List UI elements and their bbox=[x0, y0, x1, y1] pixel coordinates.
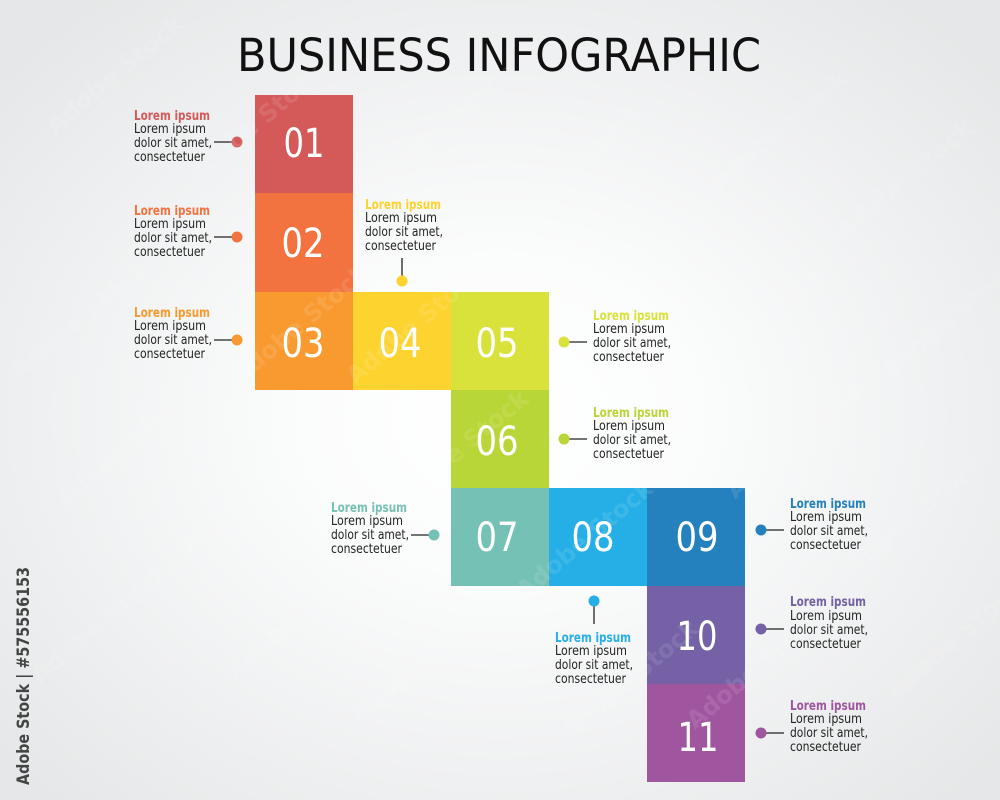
step 11: 11 bbox=[678, 715, 718, 761]
step 01: 01 bbox=[284, 121, 324, 167]
watermark pattern: Adobe Stock bbox=[551, 214, 699, 345]
callout 03: dolor sit amet, bbox=[134, 333, 212, 348]
callout 03: consectetuer bbox=[134, 347, 206, 362]
watermark pattern: Adobe Stock bbox=[41, 9, 189, 140]
watermark pattern: Adobe Stock bbox=[371, 59, 519, 190]
callout 05 bbox=[558, 309, 671, 365]
callout 11 bbox=[756, 699, 868, 755]
watermark pattern: Adobe Stock bbox=[26, 559, 174, 690]
title: BUSINESS INFOGRAPHIC bbox=[237, 29, 761, 82]
callout 04: dolor sit amet, bbox=[365, 225, 443, 240]
callout 09: Lorem ipsum bbox=[790, 510, 862, 525]
step 03: 03 bbox=[282, 321, 324, 367]
callout 10: dolor sit amet, bbox=[790, 623, 868, 638]
callout 08 bbox=[555, 596, 633, 687]
callout 10: Lorem ipsum bbox=[790, 609, 862, 624]
callout 02: consectetuer bbox=[134, 245, 206, 260]
callout 09 bbox=[756, 497, 868, 553]
callout 01: dolor sit amet, bbox=[134, 136, 212, 151]
callout 09: consectetuer bbox=[790, 538, 862, 553]
watermark pattern: Adobe Stock bbox=[181, 59, 329, 190]
callout 11: dolor sit amet, bbox=[790, 726, 868, 741]
callout 01 bbox=[134, 109, 242, 165]
callout 04: Lorem ipsum bbox=[365, 198, 441, 213]
step 02 bbox=[255, 193, 353, 292]
watermark pattern: Adobe Stock bbox=[341, 259, 489, 390]
callout 03: Lorem ipsum bbox=[134, 306, 210, 321]
callout 09: dolor sit amet, bbox=[790, 524, 868, 539]
callout 11: Lorem ipsum bbox=[790, 699, 866, 714]
callout 04 bbox=[365, 198, 443, 286]
callout 06 bbox=[558, 406, 671, 462]
step 01 bbox=[255, 95, 353, 193]
callout 08: dolor sit amet, bbox=[555, 658, 633, 673]
watermark pattern: Adobe Stock bbox=[176, 429, 324, 560]
watermark pattern: Adobe Stock bbox=[681, 259, 829, 390]
step 05 bbox=[451, 292, 549, 390]
watermark pattern: Adobe Stock bbox=[226, 259, 374, 390]
watermark pattern: Adobe Stock bbox=[501, 99, 649, 230]
callout 07: Lorem ipsum bbox=[331, 514, 403, 529]
callout 06: Lorem ipsum bbox=[593, 419, 665, 434]
callout 06: Lorem ipsum bbox=[593, 406, 669, 421]
callout 09: Lorem ipsum bbox=[790, 497, 866, 512]
callout 10: Lorem ipsum bbox=[790, 595, 866, 610]
step 10: 10 bbox=[676, 614, 718, 660]
callout 01: Lorem ipsum bbox=[134, 122, 206, 137]
step 04 bbox=[353, 292, 451, 390]
step 09 bbox=[647, 488, 745, 586]
step 09: 09 bbox=[676, 515, 718, 561]
callout 01: consectetuer bbox=[134, 150, 206, 165]
watermark pattern: Adobe Stock bbox=[831, 114, 979, 245]
step 06 bbox=[451, 390, 549, 488]
callout 07: consectetuer bbox=[331, 542, 403, 557]
callout 05: Lorem ipsum bbox=[593, 322, 665, 337]
callout 02: dolor sit amet, bbox=[134, 231, 212, 246]
watermark pattern: Adobe Stock bbox=[681, 604, 829, 735]
callout 05: Lorem ipsum bbox=[593, 309, 669, 324]
watermark pattern: Adobe Stock bbox=[556, 614, 704, 745]
watermark pattern: Adobe Stock bbox=[221, 554, 369, 685]
callout 02: Lorem ipsum bbox=[134, 217, 206, 232]
callout 07 bbox=[331, 501, 440, 557]
watermark pattern: Adobe Stock bbox=[841, 449, 989, 580]
callout 10: consectetuer bbox=[790, 637, 862, 652]
step 02: 02 bbox=[282, 221, 324, 267]
step 10 bbox=[647, 586, 745, 684]
callout 11: consectetuer bbox=[790, 740, 862, 755]
callout 05: dolor sit amet, bbox=[593, 336, 671, 351]
callout 08: Lorem ipsum bbox=[555, 644, 627, 659]
watermark pattern: Adobe Stock bbox=[51, 384, 199, 515]
callout 11: Lorem ipsum bbox=[790, 712, 862, 727]
callout 10 bbox=[756, 595, 868, 652]
watermark pattern: Adobe Stock bbox=[511, 474, 659, 605]
step 08 bbox=[549, 488, 647, 586]
callout 02: Lorem ipsum bbox=[134, 204, 210, 219]
callout 03 bbox=[134, 306, 242, 362]
step 05: 05 bbox=[476, 321, 518, 367]
callout 05: consectetuer bbox=[593, 350, 665, 365]
step 07 bbox=[451, 488, 549, 586]
callout 03: Lorem ipsum bbox=[134, 319, 206, 334]
callout 04: Lorem ipsum bbox=[365, 211, 437, 226]
step 11 bbox=[647, 684, 745, 782]
callout 01: Lorem ipsum bbox=[134, 109, 210, 124]
callout 06: consectetuer bbox=[593, 447, 665, 462]
step 04: 04 bbox=[378, 321, 422, 367]
callout 07: Lorem ipsum bbox=[331, 501, 407, 516]
watermark pattern: Adobe Stock bbox=[721, 374, 869, 505]
callout 06: dolor sit amet, bbox=[593, 433, 671, 448]
step 08: 08 bbox=[572, 515, 614, 561]
stock credit: Adobe Stock | #575556153 bbox=[14, 567, 34, 785]
callout 02 bbox=[134, 204, 242, 260]
watermark pattern: Adobe Stock bbox=[6, 254, 154, 385]
watermark pattern: Adobe Stock bbox=[386, 384, 534, 515]
watermark pattern: Adobe Stock bbox=[346, 599, 494, 730]
callout 04: consectetuer bbox=[365, 239, 437, 254]
callout 08: Lorem ipsum bbox=[555, 631, 631, 646]
step 03 bbox=[255, 292, 353, 390]
callout 08: consectetuer bbox=[555, 672, 627, 687]
step 07: 07 bbox=[476, 515, 518, 561]
watermark pattern: Adobe Stock bbox=[706, 64, 854, 195]
step 06: 06 bbox=[476, 419, 518, 465]
callout 07: dolor sit amet, bbox=[331, 528, 409, 543]
